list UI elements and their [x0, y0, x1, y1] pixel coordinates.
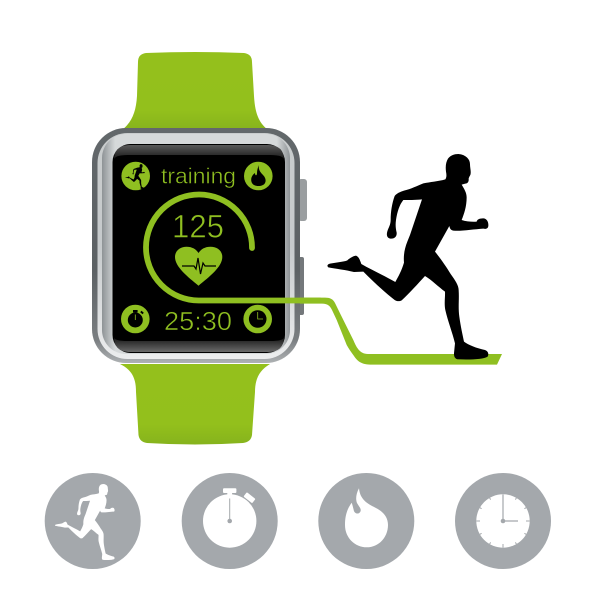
- screen label: elapsed time: 25:30: [164, 306, 232, 336]
- badge: flame: [318, 473, 414, 569]
- badge: runner: [45, 473, 141, 569]
- badge: clock: [455, 473, 551, 569]
- watch side buttons: [298, 179, 307, 315]
- strap: bottom: [120, 364, 270, 444]
- screen icon: flame: [244, 162, 273, 190]
- icon: heart with pulse: [175, 247, 222, 286]
- heart rate value: 125: [172, 208, 224, 244]
- strap: top: [122, 52, 268, 130]
- green track: [300, 298, 502, 365]
- badge: stopwatch: [182, 473, 278, 569]
- runner silhouette: [327, 154, 488, 360]
- screen icon: clock: [243, 305, 272, 333]
- watch screen: [112, 144, 285, 353]
- screen icon: runner: [121, 162, 150, 190]
- heart rate arc and connector: [146, 195, 320, 300]
- watch case: [92, 128, 300, 363]
- screen label: training: training: [161, 164, 236, 188]
- screen icon: stopwatch: [121, 305, 150, 333]
